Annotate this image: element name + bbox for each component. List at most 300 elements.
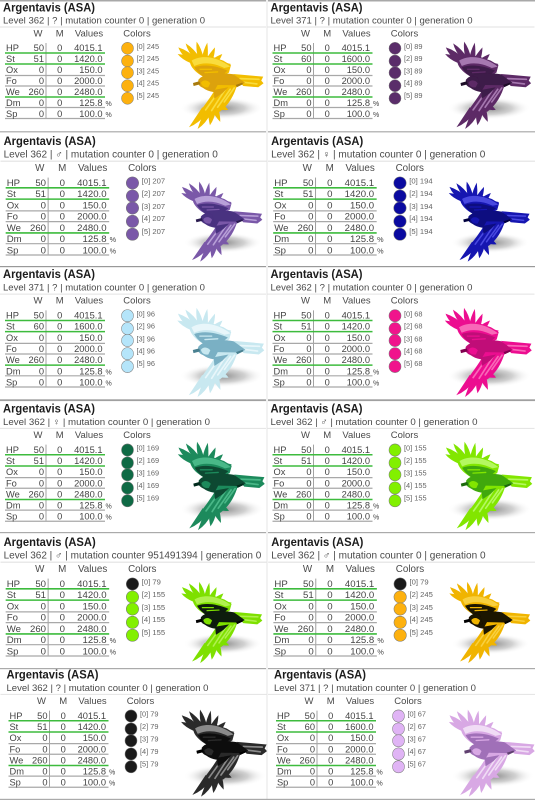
color swatches: [3] 207: [142, 202, 165, 211]
color swatches: [4] 155: [404, 481, 427, 490]
stats table: 0: [327, 590, 333, 601]
level line: Level 362 | ♂ | mutation counter 951491394 | generation 0: [4, 551, 262, 562]
stats table: 125.8: [79, 501, 103, 511]
stats table: M: [326, 163, 334, 174]
stats table: 0: [60, 200, 65, 211]
stats table: 260: [298, 624, 314, 635]
stats table: W: [303, 564, 313, 575]
stats table: [272, 430, 380, 522]
stats table: 0: [327, 178, 332, 189]
color swatches: [3] 245: [136, 66, 159, 76]
stats table: 0: [325, 76, 330, 86]
color swatches: [2] 207: [142, 189, 165, 198]
stats table: Dm: [274, 366, 288, 376]
stats table: 125.8: [350, 767, 374, 777]
stats table: 2480.0: [342, 87, 370, 97]
stats table: 0: [306, 333, 312, 343]
stats table: 51: [301, 322, 312, 332]
color swatches: [4] 89: [404, 78, 422, 88]
stats table: Fo: [274, 344, 284, 354]
stats table: 0: [327, 601, 333, 612]
stats table: %: [109, 770, 116, 777]
stats table: 260: [28, 489, 44, 499]
stats table: 0: [328, 778, 333, 788]
stats table: 0: [306, 467, 312, 477]
stats table: 0: [60, 178, 65, 189]
stats table: St: [7, 189, 16, 200]
stats table: 0: [325, 65, 330, 75]
stats table: 4015.1: [345, 579, 374, 590]
stats table: 51: [301, 456, 312, 466]
stats table: Fo: [6, 478, 17, 488]
stats table: HP: [274, 579, 288, 590]
stats table: 0: [61, 722, 66, 732]
stats table: 2480.0: [342, 355, 370, 365]
stats table: 2480.0: [345, 624, 374, 635]
stats table: 0: [327, 212, 332, 223]
stats table: 0: [57, 98, 62, 108]
stats table: 100.0: [79, 512, 103, 522]
stats table: HP: [7, 579, 20, 590]
stats table: 0: [310, 778, 315, 788]
stats table: 0: [61, 755, 66, 765]
stats table: Values: [342, 296, 371, 307]
stats table: Fo: [7, 212, 18, 223]
stats table: 4015.1: [345, 178, 374, 189]
stats table: 100.0: [347, 109, 370, 119]
panel body: [0, 267, 266, 387]
stats table: 2000.0: [342, 344, 370, 354]
stats table: HP: [277, 711, 290, 721]
stats table: HP: [274, 178, 288, 189]
stats table: 0: [327, 223, 332, 234]
stats table: We: [10, 755, 23, 765]
stats table: W: [35, 564, 45, 575]
stats table: 260: [296, 489, 312, 499]
stats table: Fo: [10, 744, 20, 754]
stats table: 100.0: [79, 377, 103, 387]
color swatches: [3] 68: [404, 334, 422, 343]
stats table: 0: [328, 767, 333, 777]
stats table: %: [106, 380, 112, 387]
stats table: We: [7, 223, 21, 234]
stats table: 0: [41, 613, 46, 624]
stats table: 125.8: [83, 635, 107, 646]
level line: Level 362 | ♂ | mutation counter 0 | generation 0: [271, 417, 478, 428]
color swatches: [3] 155: [142, 603, 165, 612]
stats table: Dm: [6, 501, 21, 511]
stats table: 0: [60, 624, 65, 635]
color swatches: [389, 28, 422, 104]
stats table: 0: [39, 333, 44, 343]
stats table: 51: [35, 590, 46, 601]
stats table: 100.0: [83, 778, 106, 788]
stats table: 0: [57, 355, 62, 365]
stats table: 0: [325, 467, 330, 477]
title: Argentavis (ASA): [4, 535, 96, 549]
color swatches: Colors: [123, 430, 151, 441]
color swatches: [392, 696, 426, 773]
stats table: We: [274, 223, 288, 234]
stats table: 2480.0: [345, 223, 374, 234]
color swatches: [5] 68: [404, 359, 422, 368]
icon: dark green bird: [178, 442, 265, 530]
stats table: 0: [57, 489, 62, 499]
stats table: 0: [325, 366, 330, 376]
stats table: 0: [310, 733, 315, 743]
stats table: 2000.0: [77, 212, 107, 223]
stats table: Sp: [7, 646, 18, 657]
color swatches: [2] 67: [408, 722, 426, 731]
stats table: Ox: [274, 200, 287, 211]
stats table: 0: [57, 333, 62, 343]
stats table: Values: [346, 696, 374, 707]
stats table: 50: [35, 178, 46, 189]
stats table: 0: [327, 646, 333, 657]
stats table: 125.8: [347, 366, 370, 376]
stats table: %: [376, 781, 383, 788]
stats table: 0: [308, 212, 314, 223]
stats table: 4015.1: [342, 445, 370, 455]
stats table: Sp: [274, 512, 285, 522]
stats table: Ox: [274, 333, 286, 343]
stats table: Ox: [7, 601, 19, 612]
stats table: Sp: [274, 245, 286, 256]
color swatches: [394, 564, 433, 641]
color swatches: Colors: [391, 296, 418, 307]
stats table: 0: [39, 344, 44, 354]
stats table: 1420.0: [78, 722, 106, 732]
stats table: 1420.0: [345, 189, 374, 200]
stats table: M: [59, 696, 67, 707]
stats table: %: [377, 647, 384, 656]
title: Argentavis (ASA): [7, 667, 99, 681]
stats table: 60: [305, 722, 315, 732]
stats table: 2480.0: [74, 87, 102, 97]
title: Argentavis (ASA): [3, 267, 95, 281]
stats table: 0: [42, 767, 48, 777]
stats table: %: [106, 112, 112, 119]
color swatches: Colors: [391, 28, 418, 40]
stats table: 0: [60, 590, 65, 601]
icon: black bird: [181, 710, 267, 797]
stats table: 260: [296, 87, 312, 97]
stats table: 4015.1: [74, 310, 103, 320]
color swatches: [0] 68: [404, 309, 422, 318]
stats table: 2480.0: [77, 223, 107, 234]
stats table: 0: [57, 76, 62, 86]
color swatches: [0] 96: [136, 309, 155, 318]
stats table: 0: [306, 478, 312, 488]
stats table: 0: [325, 98, 330, 108]
panel body: [0, 535, 266, 657]
stats table: Values: [346, 564, 375, 575]
stats table: 0: [327, 245, 332, 256]
stats table: 0: [308, 200, 314, 211]
stats table: %: [110, 246, 117, 255]
stats table: Sp: [6, 377, 17, 387]
stats table: 0: [41, 200, 46, 211]
stats table: %: [106, 369, 112, 376]
stats table: St: [6, 322, 15, 332]
stats table: %: [376, 770, 383, 777]
stats table: Dm: [7, 234, 22, 245]
color swatches: [4] 245: [409, 615, 433, 624]
stats table: 0: [325, 355, 330, 365]
stats table: M: [326, 564, 334, 575]
stats table: 0: [57, 366, 62, 376]
stats table: Fo: [274, 212, 285, 223]
stats table: St: [274, 590, 284, 601]
color swatches: [3] 245: [409, 603, 433, 612]
stats table: 0: [328, 733, 333, 743]
stats table: 50: [35, 579, 46, 590]
stats table: Fo: [274, 478, 284, 488]
stats table: 2480.0: [77, 624, 107, 635]
stats table: 0: [325, 87, 330, 97]
stats table: 0: [306, 366, 312, 376]
stats table: 0: [325, 377, 330, 387]
stats table: Ox: [274, 601, 287, 612]
level line: Level 362 | ? | mutation counter 0 | generation 0: [271, 282, 473, 294]
icon: blue bird: [449, 182, 530, 262]
stats table: %: [110, 647, 117, 656]
stats table: 0: [57, 344, 62, 354]
stats table: 0: [325, 478, 330, 488]
stats table: 1420.0: [342, 456, 370, 466]
stats table: 2000.0: [74, 76, 102, 86]
stats table: 1600.0: [74, 322, 103, 332]
title: Argentavis (ASA): [271, 401, 363, 415]
stats table: 0: [39, 65, 44, 75]
panel: pale blue argentavis: [0, 266, 266, 397]
stats table: Sp: [6, 109, 17, 119]
stats table: 260: [299, 755, 315, 765]
color swatches: Colors: [396, 564, 424, 575]
stats table: HP: [274, 43, 286, 53]
panel body: [268, 134, 535, 256]
stats table: 1600.0: [342, 54, 370, 64]
panel: black argentavis: [0, 667, 267, 797]
level line: Level 371 | ? | mutation counter 0 | generation 0: [3, 282, 205, 294]
stats table: Ox: [274, 65, 286, 75]
stats table: 4015.1: [77, 579, 107, 590]
color swatches: [2] 194: [409, 189, 433, 198]
stats table: 2000.0: [345, 613, 374, 624]
stats table: 0: [325, 344, 330, 354]
stats table: [272, 28, 379, 119]
panel body: [268, 535, 535, 657]
stats table: %: [106, 515, 112, 522]
stats table: Sp: [274, 109, 285, 119]
stats table: 100.0: [347, 377, 370, 387]
stats table: 50: [34, 43, 44, 53]
level line: Level 362 | ♀ | mutation counter 0 | generation 0: [3, 417, 210, 428]
stats table: HP: [7, 178, 20, 189]
stats table: 0: [60, 579, 65, 590]
stats table: 0: [57, 310, 62, 320]
stats table: 150.0: [347, 65, 370, 75]
panel: blue argentavis: [268, 131, 535, 262]
stats table: M: [323, 296, 331, 307]
stats table: We: [7, 624, 21, 635]
stats table: [272, 296, 380, 387]
stats table: [5, 28, 112, 119]
color swatches: Colors: [391, 430, 418, 441]
color swatches: [122, 430, 159, 507]
stats table: 0: [57, 54, 62, 64]
stats table: Sp: [274, 646, 286, 657]
stats table: 0: [328, 711, 333, 721]
stats table: 0: [325, 109, 330, 119]
stats table: 150.0: [347, 333, 370, 343]
stats table: 0: [310, 744, 315, 754]
stats table: 0: [325, 43, 330, 53]
stats table: 100.0: [350, 646, 374, 657]
stats table: 51: [303, 590, 314, 601]
stats table: 0: [39, 512, 44, 522]
stats table: W: [35, 163, 45, 174]
stats table: Sp: [274, 377, 285, 387]
stats table: 50: [303, 178, 314, 189]
color swatches: [5] 96: [136, 359, 155, 368]
stats table: 4015.1: [78, 711, 106, 721]
color swatches: [5] 79: [140, 759, 158, 768]
color swatches: [2] 245: [409, 590, 433, 599]
stats table: Ox: [6, 467, 18, 477]
stats table: 51: [34, 456, 44, 466]
stats table: 0: [60, 646, 65, 657]
stats table: 0: [61, 733, 66, 743]
color swatches: [2] 89: [404, 54, 422, 63]
color swatches: [2] 68: [404, 322, 422, 331]
stats table: 0: [39, 366, 44, 376]
stats table: 0: [41, 234, 46, 245]
stats table: 1600.0: [345, 722, 374, 732]
panel: dark purple argentavis: [268, 0, 535, 129]
panel: dark green argentavis: [0, 399, 266, 530]
color swatches: [5] 67: [408, 759, 426, 768]
stats table: W: [34, 430, 42, 441]
stats table: [8, 696, 116, 788]
stats table: Fo: [274, 76, 284, 86]
stats table: 0: [325, 512, 330, 522]
stats table: Ox: [6, 333, 18, 343]
stats table: W: [301, 296, 310, 307]
stats table: 0: [308, 613, 314, 624]
stats table: M: [323, 28, 331, 40]
stats table: 0: [325, 322, 330, 332]
stats table: 2480.0: [345, 755, 374, 765]
stats table: Values: [78, 696, 107, 707]
title: Argentavis (ASA): [3, 401, 95, 415]
panel: yellow argentavis: [0, 0, 266, 129]
stats table: W: [305, 696, 313, 707]
stats table: 0: [306, 501, 312, 511]
stats table: Fo: [6, 344, 17, 354]
stats table: 2000.0: [74, 344, 103, 354]
color swatches: [2] 155: [142, 590, 165, 599]
stats table: We: [6, 87, 20, 97]
color swatches: [389, 430, 427, 507]
stats table: 260: [28, 87, 44, 97]
stats table: 0: [327, 189, 332, 200]
stats table: Values: [75, 430, 103, 441]
stats table: 2480.0: [342, 489, 370, 499]
color swatches: [2] 169: [136, 456, 159, 465]
color swatches: Colors: [394, 696, 422, 707]
stats table: Dm: [274, 635, 289, 646]
stats table: 0: [61, 744, 66, 754]
stats table: 0: [57, 456, 62, 466]
stats table: HP: [10, 711, 22, 721]
color swatches: [2] 79: [140, 722, 158, 731]
stats table: 260: [28, 355, 44, 365]
stats table: 260: [296, 355, 312, 365]
color swatches: [0] 245: [136, 42, 159, 51]
title: Argentavis (ASA): [271, 267, 363, 281]
stats table: 0: [306, 344, 312, 354]
stats table: 0: [327, 200, 332, 211]
stats table: 0: [308, 635, 314, 646]
stats table: 0: [57, 65, 62, 75]
stats table: M: [58, 163, 66, 174]
stats table: 125.8: [83, 767, 106, 777]
stats table: Dm: [277, 767, 292, 777]
color swatches: [4] 194: [409, 214, 433, 223]
stats table: HP: [6, 445, 19, 455]
stats table: 0: [327, 234, 332, 245]
stats table: %: [373, 515, 380, 522]
stats table: 0: [41, 245, 46, 256]
stats table: 0: [39, 467, 44, 477]
color swatches: [5] 155: [142, 628, 165, 637]
stats table: 0: [41, 212, 46, 223]
panel body: [268, 0, 534, 119]
stats table: Fo: [6, 76, 17, 86]
stats table: 60: [34, 322, 44, 332]
stats table: 100.0: [79, 109, 102, 119]
stats table: 4015.1: [345, 711, 374, 721]
stats table: %: [373, 504, 380, 511]
stats table: 0: [57, 87, 62, 97]
stats table: 4015.1: [74, 43, 102, 53]
stats table: 50: [301, 310, 312, 320]
stats table: M: [56, 28, 64, 40]
color swatches: [4] 245: [136, 78, 159, 88]
stats table: 0: [327, 613, 333, 624]
color swatches: [3] 194: [409, 202, 433, 211]
stats table: 50: [34, 445, 44, 455]
stats table: 0: [325, 489, 330, 499]
stats table: 51: [37, 722, 48, 732]
stats table: 0: [41, 635, 46, 646]
stats table: We: [274, 489, 287, 499]
stats table: 0: [57, 501, 62, 511]
stats table: Dm: [6, 366, 21, 376]
stats table: Dm: [7, 635, 22, 646]
stats table: 0: [60, 613, 65, 624]
stats table: 0: [42, 744, 48, 754]
stats table: 0: [39, 98, 44, 108]
stats table: 51: [303, 189, 314, 200]
stats table: Ox: [277, 733, 289, 743]
stats table: 4015.1: [77, 178, 107, 189]
stats table: Dm: [10, 767, 24, 777]
stats table: 0: [328, 755, 333, 765]
stats table: %: [109, 781, 116, 788]
icon: dark purple bird: [445, 42, 531, 129]
